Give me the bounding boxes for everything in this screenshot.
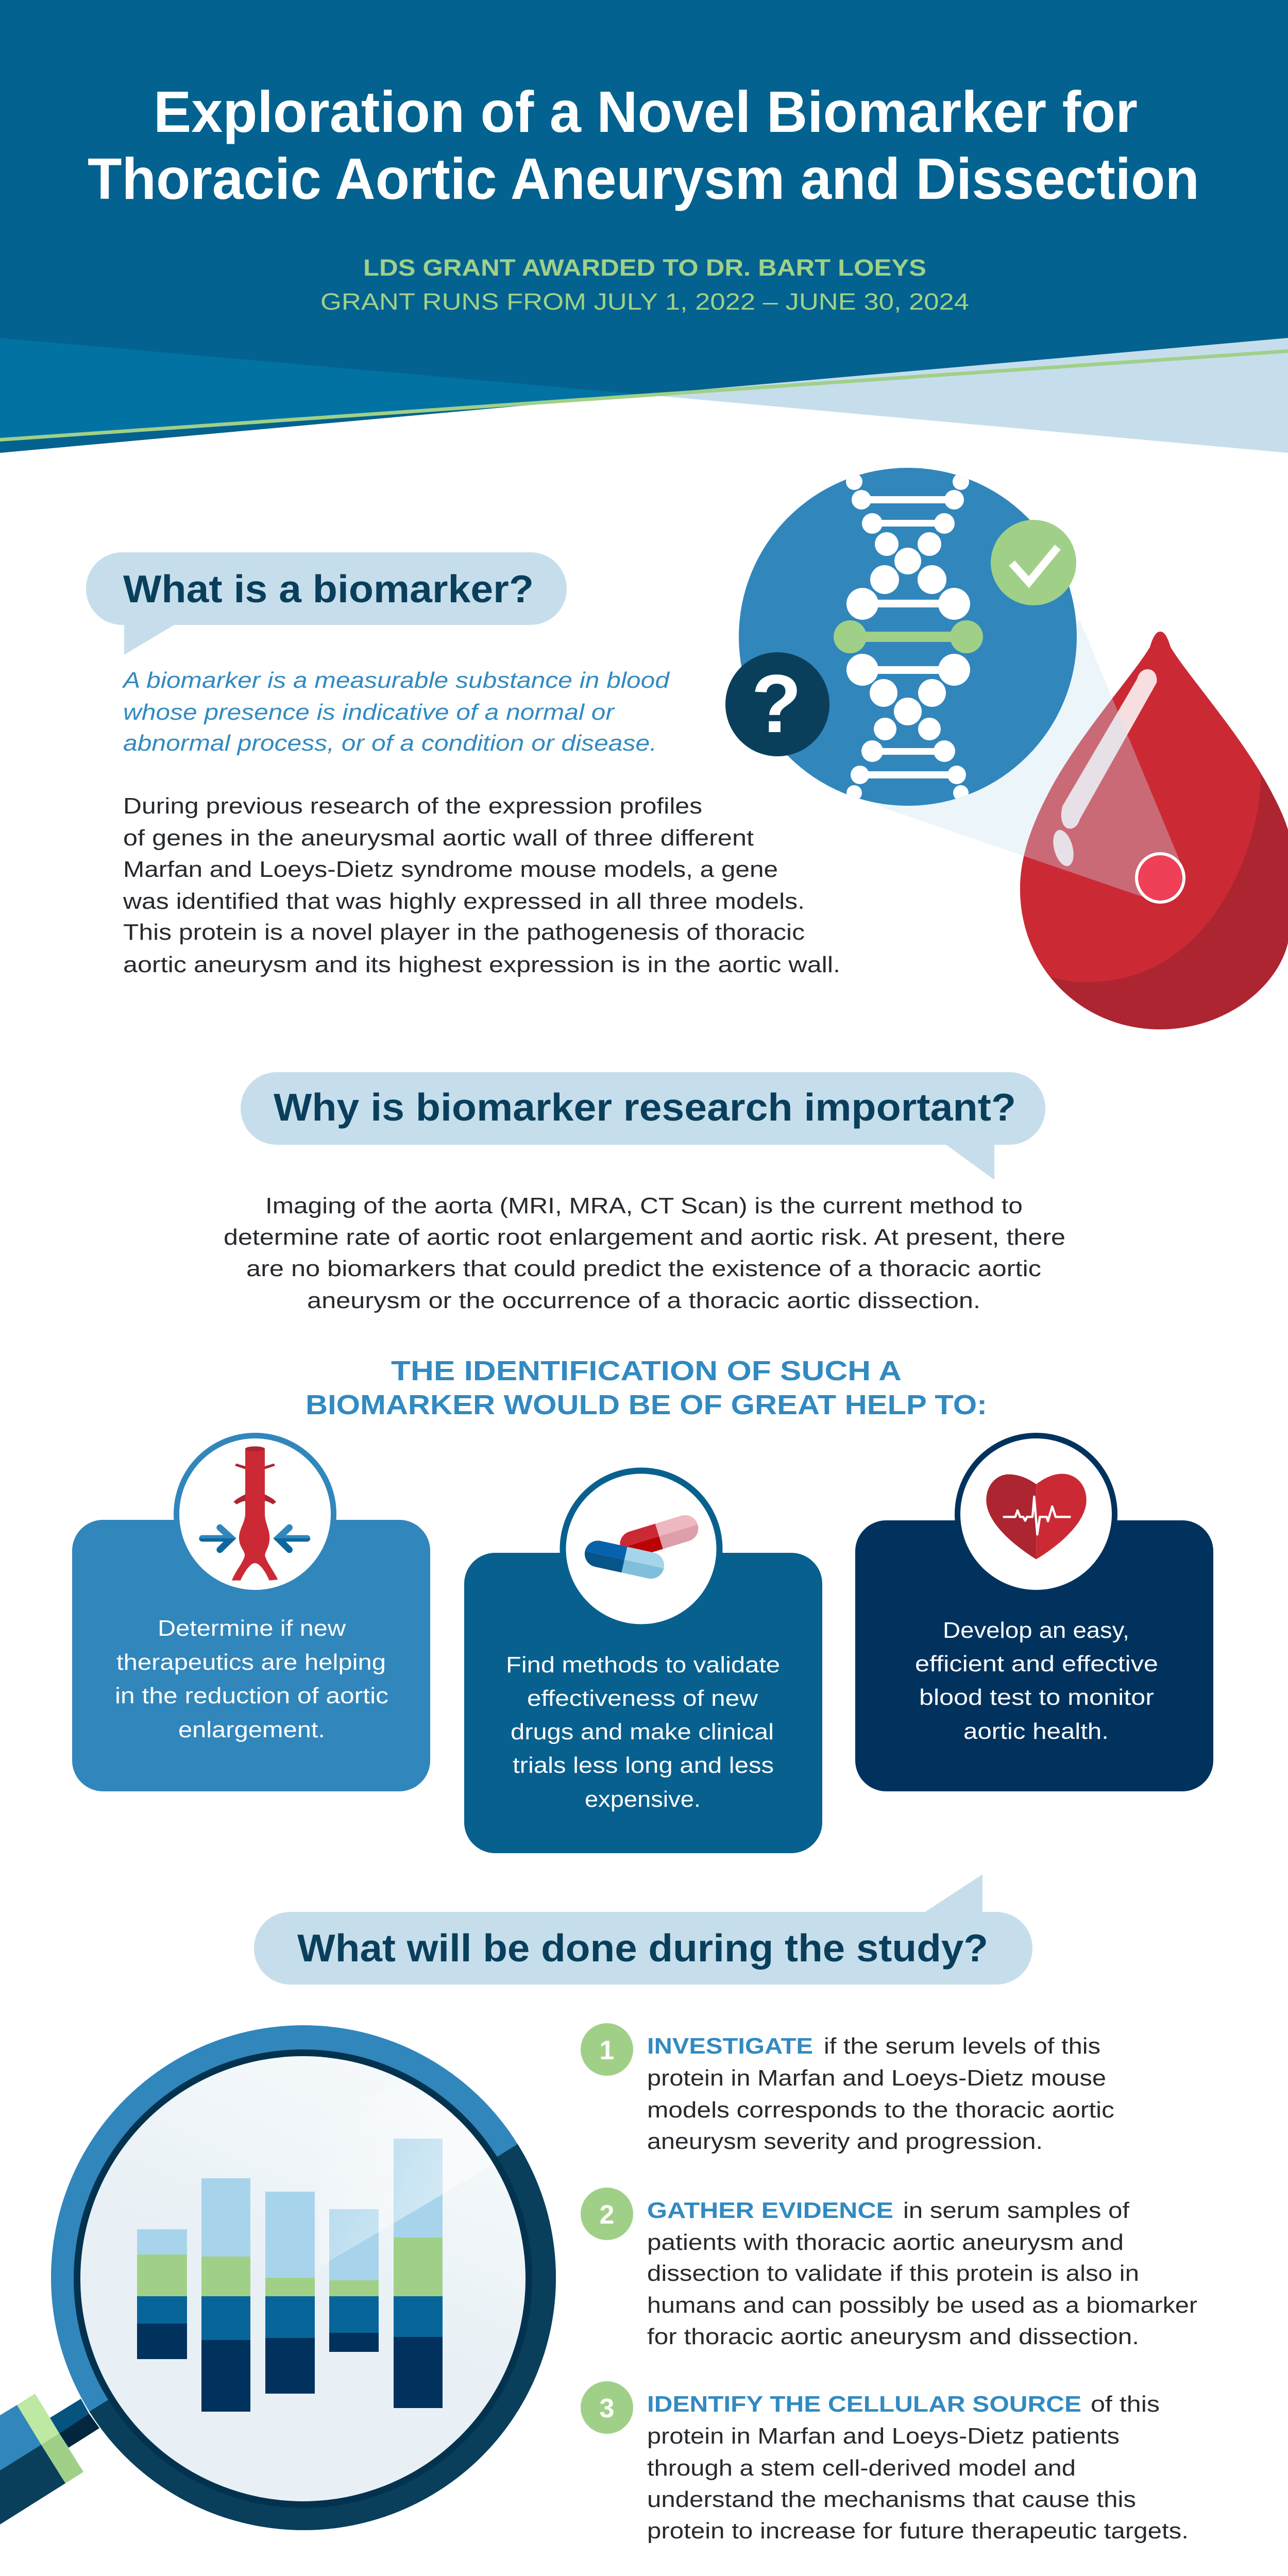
- card text: trials less long and less: [513, 1753, 774, 1778]
- subheading: BIOMARKER WOULD BE OF GREAT HELP TO:: [306, 1389, 987, 1420]
- subheading: [306, 1355, 987, 1420]
- step 2: gather evidence: in serum samples of: [903, 2198, 1130, 2223]
- card text: [915, 1618, 1158, 1744]
- card: develop an easy blood test: [855, 1433, 1213, 1791]
- icon: question mark: ?: [751, 657, 802, 750]
- heading bubble: What is a biomarker?: [123, 567, 534, 611]
- title: [88, 79, 1199, 211]
- heading bubble: what will be done: [254, 1874, 1032, 1985]
- title: Thoracic Aortic Aneurysm and Dissection: [88, 146, 1199, 211]
- card text: Determine if new: [158, 1616, 346, 1641]
- card text: therapeutics are helping: [116, 1650, 386, 1675]
- definition text: A biomarker is a measurable substance in blood: [122, 668, 670, 693]
- step 2: gather evidence: for thoracic aortic aneurysm and dissection.: [647, 2324, 1139, 2349]
- header banner: [0, 0, 1288, 453]
- card text: enlargement.: [178, 1717, 325, 1742]
- card text: expensive.: [585, 1787, 701, 1812]
- card: find methods to validate: [464, 1467, 822, 1853]
- card text: in the reduction of aortic: [115, 1683, 388, 1708]
- grant subtitle: [320, 255, 969, 315]
- body text: was identified that was highly expressed in all three models.: [123, 889, 805, 914]
- body text: [123, 793, 840, 977]
- step 3: identify the cellular source: through a stem cell-derived model and: [647, 2455, 1076, 2481]
- heading bubble: what will be done: What will be done during the study?: [297, 1926, 988, 1970]
- body text: aneurysm or the occurrence of a thoracic aortic dissection.: [307, 1288, 980, 1313]
- step 2: gather evidence: patients with thoracic aortic aneurysm and: [647, 2230, 1124, 2255]
- step 3: identify the cellular source: protein to increase for future therapeutic targets.: [647, 2518, 1189, 2544]
- heading bubble: [86, 552, 567, 655]
- body text: Marfan and Loeys-Dietz syndrome mouse models, a gene: [123, 857, 778, 882]
- icon: aorta: [202, 1446, 307, 1581]
- title: Exploration of a Novel Biomarker for: [154, 79, 1138, 144]
- icon: heart with pulse: [986, 1474, 1087, 1560]
- body text: This protein is a novel player in the pathogenesis of thoracic: [123, 920, 805, 945]
- grant subtitle: GRANT RUNS FROM JULY 1, 2022 – JUNE 30, 2024: [320, 289, 969, 315]
- step 1: investigate: if the serum levels of this: [824, 2033, 1100, 2059]
- card text: Find methods to validate: [506, 1652, 780, 1677]
- card text: blood test to monitor: [919, 1685, 1154, 1710]
- body text: Imaging of the aorta (MRI, MRA, CT Scan) is the current method to: [265, 1193, 1023, 1218]
- panel: what is a biomarker: [86, 552, 840, 977]
- body text: During previous research of the expression profiles: [123, 793, 702, 819]
- step 3: identify the cellular source: [581, 2381, 1189, 2544]
- card text: Develop an easy,: [943, 1618, 1129, 1643]
- card text: drugs and make clinical: [511, 1719, 774, 1744]
- step 3: identify the cellular source: IDENTIFY THE CELLULAR SOURCE: [647, 2392, 1081, 2417]
- step 1: investigate: aneurysm severity and progression.: [647, 2129, 1043, 2154]
- step 1: investigate: models corresponds to the thoracic aortic: [647, 2097, 1114, 2123]
- step 3: identify the cellular source: understand the mechanisms that cause this: [647, 2487, 1136, 2512]
- body text: of genes in the aneurysmal aortic wall of three different: [123, 825, 754, 851]
- body text: [224, 1193, 1065, 1313]
- step 1: investigate: INVESTIGATE: [647, 2033, 813, 2059]
- definition text: abnormal process, or of a condition or disease.: [123, 731, 657, 756]
- grant subtitle: LDS GRANT AWARDED TO DR. BART LOEYS: [363, 255, 926, 281]
- body text: are no biomarkers that could predict the existence of a thoracic aortic: [246, 1256, 1041, 1281]
- subheading: THE IDENTIFICATION OF SUCH A: [391, 1355, 902, 1386]
- body text: aortic aneurysm and its highest expression is in the aortic wall.: [123, 952, 840, 977]
- step 2: gather evidence: [581, 2188, 1197, 2349]
- icon: question mark: [725, 652, 829, 756]
- step 3: identify the cellular source: 3: [600, 2394, 614, 2424]
- card text: [506, 1652, 780, 1812]
- step 2: gather evidence: humans and can possibly be used as a biomarker: [647, 2293, 1197, 2318]
- step 2: gather evidence: GATHER EVIDENCE: [647, 2198, 893, 2223]
- step 3: identify the cellular source: of this: [1091, 2392, 1160, 2417]
- heading bubble: Why is biomarker research important?: [274, 1086, 1016, 1129]
- icon: DNA circle: [739, 468, 1077, 806]
- icon: sample dot: [1137, 854, 1184, 902]
- bar chart: [137, 2139, 443, 2412]
- step 3: identify the cellular source: protein in Marfan and Loeys-Dietz patients: [647, 2424, 1120, 2449]
- step 1: investigate: protein in Marfan and Loeys-Dietz mouse: [647, 2065, 1106, 2091]
- heading bubble: [241, 1072, 1045, 1180]
- illustration: DNA and blood drop: [725, 468, 1288, 1029]
- step 1: investigate: 1: [600, 2036, 614, 2065]
- definition text: whose presence is indicative of a normal or: [123, 700, 616, 725]
- icon: green check: [991, 520, 1076, 605]
- panel: why is biomarker research important: [224, 1072, 1065, 1420]
- icon: blood drop: [1005, 618, 1288, 1029]
- step 2: gather evidence: 2: [600, 2200, 614, 2230]
- card text: aortic health.: [963, 1719, 1109, 1744]
- card: determine if new therapeutics: [72, 1433, 430, 1791]
- card text: [115, 1616, 388, 1742]
- step 2: gather evidence: dissection to validate if this protein is also in: [647, 2261, 1139, 2286]
- step 1: investigate: [581, 2023, 1114, 2154]
- card text: efficient and effective: [915, 1651, 1158, 1676]
- body text: determine rate of aortic root enlargement and aortic risk. At present, there: [224, 1225, 1065, 1250]
- definition text: [122, 668, 670, 756]
- icon: capsules: [582, 1512, 702, 1581]
- icon: magnifying glass with bar chart: [0, 2025, 567, 2550]
- card text: effectiveness of new: [527, 1686, 758, 1711]
